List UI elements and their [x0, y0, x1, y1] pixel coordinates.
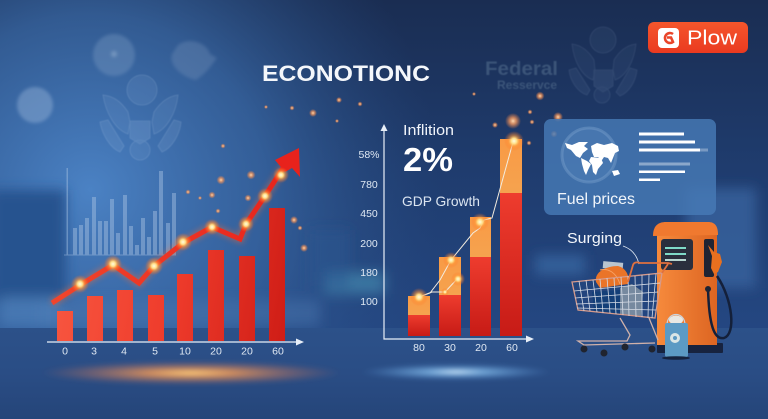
globe map icon — [562, 128, 620, 182]
y axis labels: 100 — [360, 296, 378, 308]
x axis labels — [413, 342, 518, 354]
inflation label: Inflition — [403, 123, 454, 139]
x axis — [47, 338, 304, 346]
Federal Reserve text — [485, 58, 558, 92]
x axis labels: 30 — [444, 342, 456, 354]
x axis labels: 20 — [241, 346, 253, 358]
icon: shopping cart — [572, 261, 672, 356]
y axis labels: 780 — [360, 179, 378, 191]
title: ECONOTIONC — [262, 61, 430, 86]
y axis labels: 180 — [360, 267, 378, 279]
x axis labels: 60 — [272, 346, 284, 358]
sparks — [186, 92, 563, 252]
trend lines — [419, 142, 513, 297]
x axis labels: 20 — [475, 342, 487, 354]
pump screen — [661, 239, 693, 270]
floor glow: orange — [41, 361, 341, 385]
x axis labels: 0 — [62, 346, 68, 358]
surging label with pointer: Surging — [567, 231, 622, 247]
ghost bar chart — [64, 168, 176, 256]
blurred emblem 1 — [93, 34, 135, 76]
x axis labels: 3 — [91, 346, 97, 358]
x axis labels: 80 — [413, 342, 425, 354]
Federal Reserve text: Resservce — [497, 78, 557, 92]
badge: Plow — [648, 22, 748, 53]
x axis labels: 20 — [210, 346, 222, 358]
rising trend arrow — [52, 148, 300, 303]
glowing nodes — [410, 131, 524, 306]
eagle seal left — [100, 75, 181, 160]
axes — [380, 124, 534, 342]
surging label with pointer — [567, 231, 639, 264]
x axis labels: 60 — [506, 342, 518, 354]
Federal Reserve text: Federal — [485, 58, 558, 80]
y axis labels — [358, 149, 380, 308]
y axis labels: 200 — [360, 238, 378, 250]
x axis labels: 4 — [121, 346, 127, 358]
icon: blue canister — [662, 314, 690, 360]
x axis labels: 10 — [179, 346, 191, 358]
stacked bars — [408, 139, 522, 336]
glowing nodes — [71, 167, 289, 293]
red bars — [57, 208, 285, 341]
y axis labels: 58% — [358, 149, 380, 161]
panel label: Fuel prices — [557, 191, 635, 208]
blurred emblem 3 — [17, 87, 53, 123]
x axis labels: 5 — [152, 346, 158, 358]
cart goods — [592, 261, 643, 316]
eagle seal right — [569, 27, 637, 103]
inflation value: 2% — [403, 141, 453, 178]
badge: Plow: Plow — [687, 26, 737, 50]
panel text lines — [639, 132, 708, 181]
badge icon — [658, 28, 679, 48]
panel: fuel prices — [544, 119, 716, 215]
left chart — [47, 148, 304, 358]
floor glow: blue — [361, 364, 551, 380]
blurred emblem 2 — [171, 41, 217, 80]
icon: fuel pump — [653, 222, 731, 353]
cart handle — [628, 262, 672, 282]
faded seals and emblems — [17, 27, 637, 160]
GDP growth label: GDP Growth — [402, 193, 480, 209]
x axis labels — [62, 346, 284, 358]
pump nozzle — [704, 239, 731, 338]
cart frame and wheels — [578, 318, 658, 356]
cart basket — [572, 273, 662, 318]
middle chart — [358, 123, 534, 354]
y axis labels: 450 — [360, 208, 378, 220]
